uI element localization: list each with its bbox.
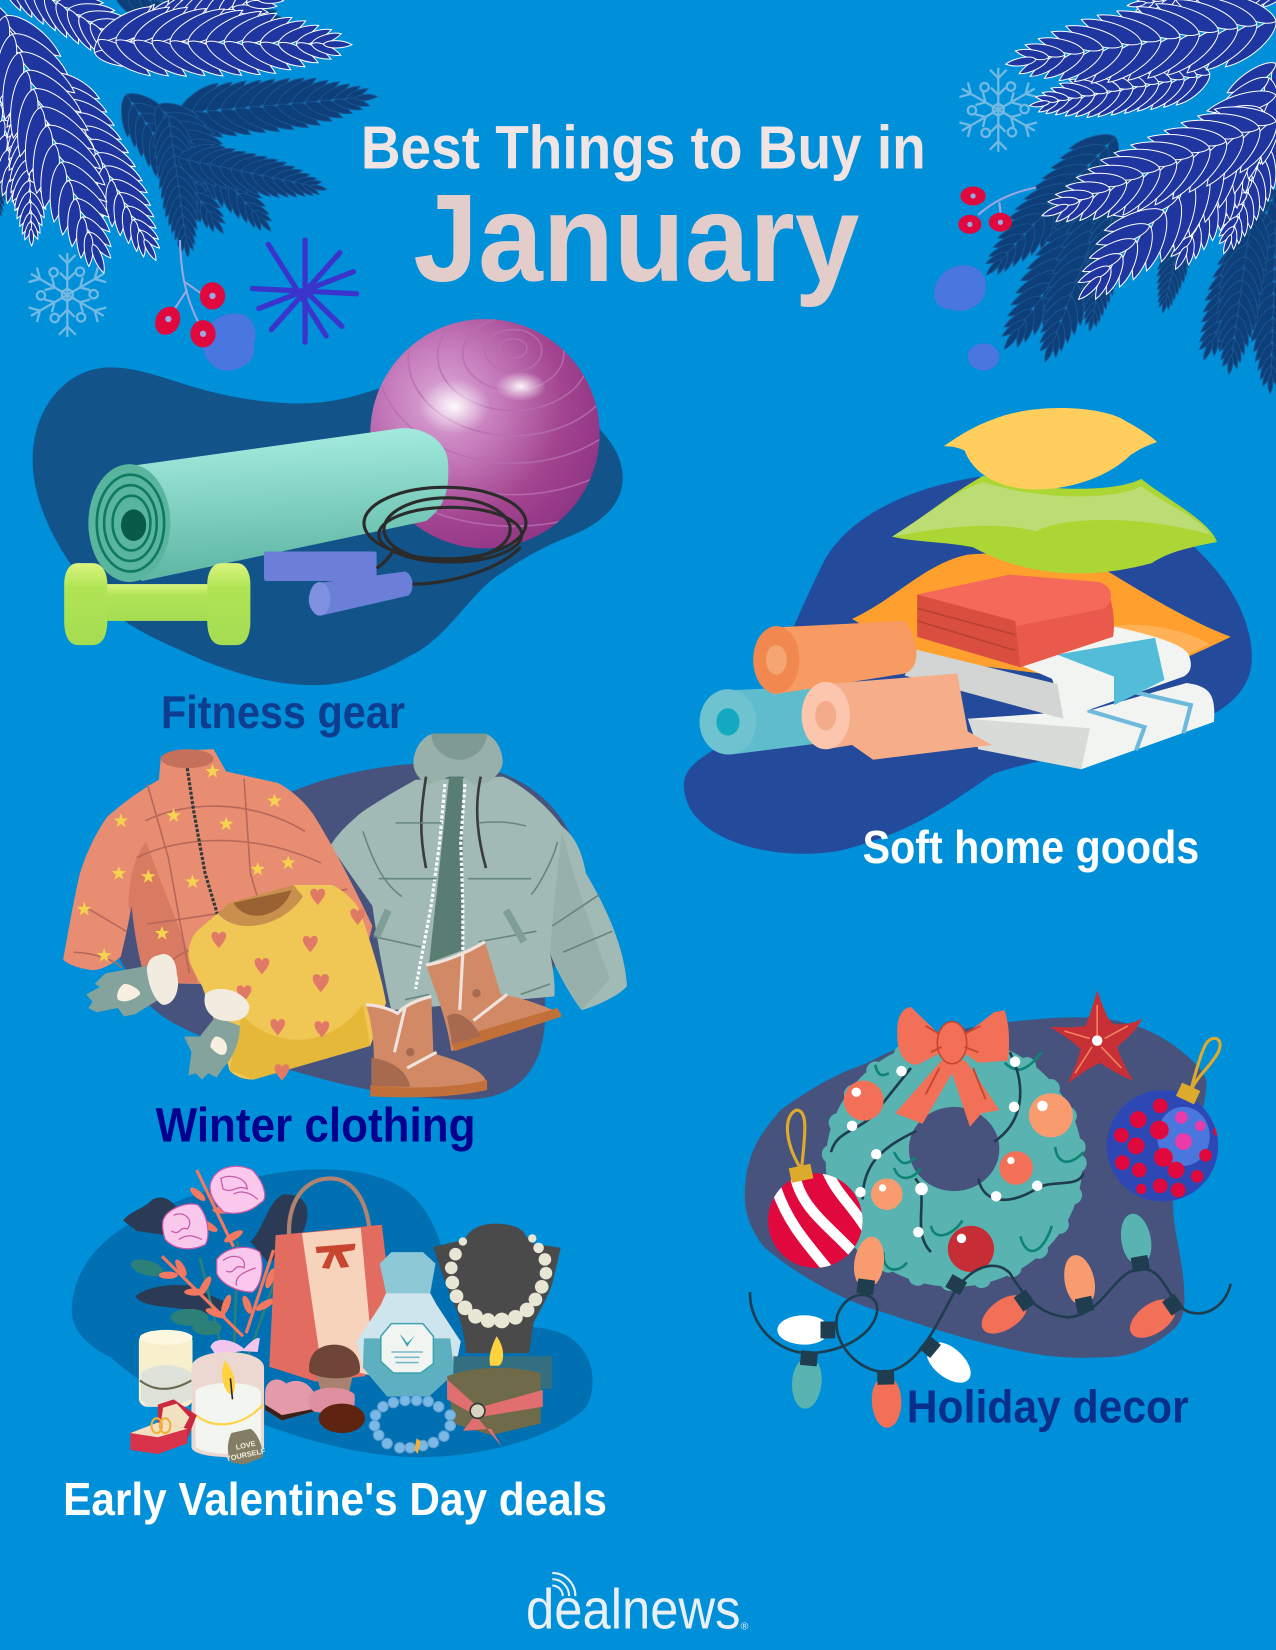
panel: soft home goods [684,408,1252,854]
title: January [413,170,859,308]
blob [684,477,1252,854]
blob [33,367,623,685]
brown candle [447,1336,543,1447]
yellow pillow [944,408,1157,489]
ornament: striped [768,1110,868,1273]
icon: right snowflake [953,68,1043,152]
panel: holiday decor [745,990,1231,1428]
icon: left paint blob [203,313,255,371]
title [361,114,926,308]
poinsettia star [1050,990,1142,1084]
logo: dealnews: ® [741,1621,749,1633]
yoga mat [88,428,448,582]
logo: dealnews: dealnews [526,1579,741,1642]
ring box [130,1399,197,1454]
title: Best Things to Buy in [361,114,926,182]
jump rope [264,487,526,616]
fir branches: top left [0,0,380,289]
white towel upper [905,626,1191,719]
fir branches: top right [964,0,1276,394]
blob [745,1017,1207,1358]
panel: early valentine's day deals [72,1166,593,1465]
white candle with tag: YOURSELF [225,1446,267,1463]
icon: right berries [958,186,1036,234]
label: fitness gear: Fitness gear [161,686,405,738]
grey puffer coat [330,733,627,1010]
string lights [750,1211,1231,1428]
icon: left berries [155,240,225,347]
blob [72,1169,593,1457]
ornament: polka dot [1107,1038,1223,1202]
icon: star burst [252,240,357,342]
exercise ball [370,319,600,548]
white candle with tag: LOVE [235,1439,256,1452]
blob [116,763,581,1100]
label: soft home goods: Soft home goods [863,821,1199,873]
gloves [86,954,249,1080]
white candle with tag [191,1352,267,1465]
wreath [826,1007,1083,1287]
label: early valentine's day deals: Early Valentine's Day deals [63,1473,607,1525]
perfume bottle [357,1252,461,1396]
icon: right paint blobs [934,265,999,371]
label: holiday decor: Holiday decor [907,1381,1189,1433]
red towel [917,575,1114,667]
uggs [366,942,562,1097]
teal towel roll [700,686,831,755]
jar candle [139,1330,193,1407]
flowers [129,1166,277,1368]
panel: fitness gear [32,319,623,686]
dark foliage [123,1194,308,1316]
pearl bracelet [369,1395,455,1454]
dumbbell [64,563,250,645]
icon: left snowflake [22,253,112,337]
label: winter clothing: Winter clothing [156,1099,475,1153]
peach towel roll [802,674,992,760]
white towel lower [968,683,1214,769]
green pillow [892,476,1217,573]
pink jacket [63,749,372,984]
macarons and muffin [265,1345,365,1433]
yellow sweater [188,885,386,1081]
necklace on bust [433,1224,561,1389]
wreath bow [895,1007,1009,1127]
orange towel roll [753,621,917,695]
orange pillow [852,553,1231,684]
shopping bag [269,1178,390,1381]
panel: winter clothing [63,733,627,1100]
wreath baubles [844,1081,1073,1272]
